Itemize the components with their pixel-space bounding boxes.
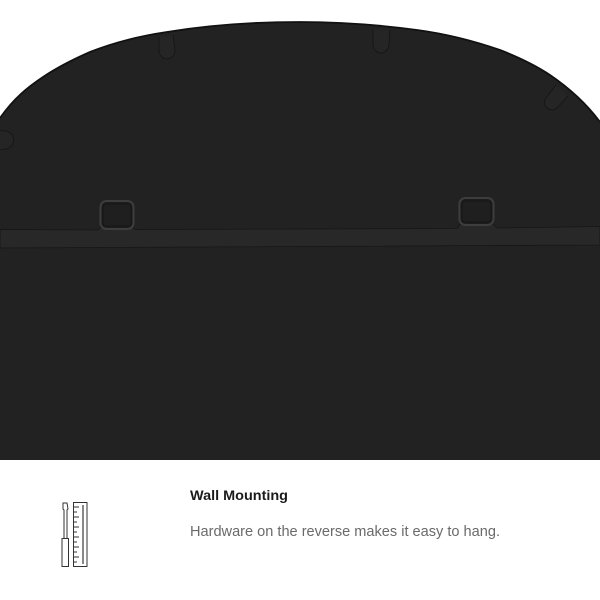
heading: Wall Mounting <box>190 487 288 503</box>
description: Hardware on the reverse makes it easy to hang. <box>190 523 500 540</box>
frame rim highlight <box>0 22 600 122</box>
icon: wand and ruler <box>62 502 87 566</box>
hanging bar <box>0 222 600 248</box>
product photo: mirror reverse <box>0 22 600 460</box>
clip: right shoulder <box>545 85 568 110</box>
hanging loop: left <box>100 201 134 229</box>
icon: ruler <box>74 502 87 566</box>
hanging loop: right <box>460 198 494 225</box>
clip: top right <box>373 29 390 53</box>
mirror back panel <box>0 22 600 460</box>
clip: left edge <box>0 130 14 150</box>
clip: top left <box>159 35 175 59</box>
icon: wand <box>62 503 68 566</box>
